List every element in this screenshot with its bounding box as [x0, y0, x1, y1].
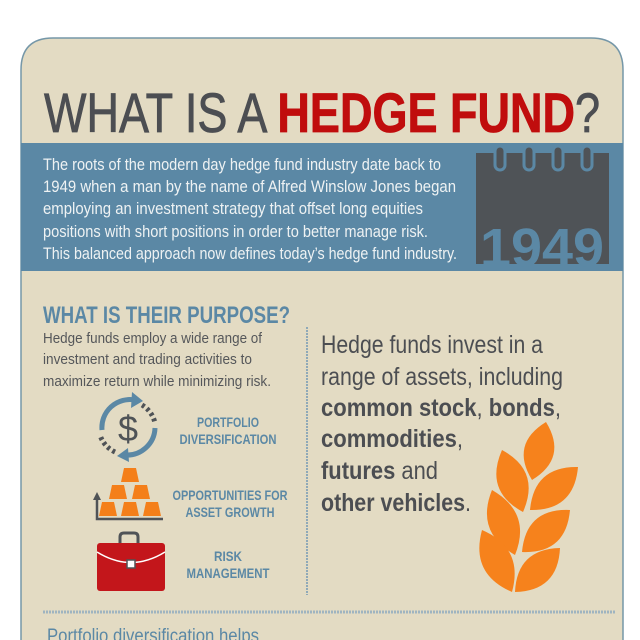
text block: history: employing an investment strategy that offset long equities: [43, 199, 423, 218]
icon: briefcase: [97, 533, 165, 591]
text block: purpose: maximize return while minimizing risk.: [43, 373, 271, 390]
label: portfolio diversification: PORTFOLIO: [197, 414, 259, 430]
text block: purpose: investment and trading activities to: [43, 351, 252, 368]
label: risk management: [186, 548, 270, 581]
text block: assets: [321, 331, 563, 517]
text block: assets: futures and: [321, 457, 438, 485]
text block: history: [43, 155, 457, 263]
label: risk management: RISK: [214, 548, 242, 564]
text block: assets: commodities,: [321, 425, 463, 453]
icon: wheat: [479, 422, 578, 592]
text block: assets: other vehicles.: [321, 489, 471, 517]
text block: purpose: [43, 330, 271, 390]
text block: history: This balanced approach now defines today’s hedge fund industry.: [43, 244, 457, 263]
label: portfolio diversification: DIVERSIFICATION: [180, 431, 276, 447]
text block: history: The roots of the modern day hedge fund industry date back to: [43, 155, 441, 174]
icon: calendar 1949: 1949: [480, 218, 604, 278]
text block: history: 1949 when a man by the name of Alfred Winslow Jones began: [43, 177, 456, 196]
text block: assets: range of assets, including: [321, 363, 563, 391]
heading: purpose: WHAT IS THEIR PURPOSE?: [43, 302, 290, 329]
panel: history band: [21, 143, 623, 271]
text block: purpose: Hedge funds employ a wide range of: [43, 330, 263, 347]
label: asset growth: [172, 487, 288, 520]
text block: assets: common stock, bonds,: [321, 394, 561, 422]
icon: gold bars: [93, 468, 163, 519]
label: asset growth: OPPORTUNITIES FOR: [172, 487, 288, 503]
label: risk management: MANAGEMENT: [186, 565, 270, 581]
text block: assets: Hedge funds invest in a: [321, 331, 543, 359]
icon: dollar cycle: $: [118, 408, 138, 449]
label: asset growth: ASSET GROWTH: [186, 504, 274, 520]
text block: history: positions with short positions in order to better manage risk.: [43, 222, 428, 241]
icon: calendar 1949: [476, 146, 609, 278]
title: WHAT IS A HEDGE FUND?: [44, 81, 600, 144]
label: portfolio diversification: [180, 414, 276, 447]
icon: dollar cycle: [100, 392, 155, 462]
